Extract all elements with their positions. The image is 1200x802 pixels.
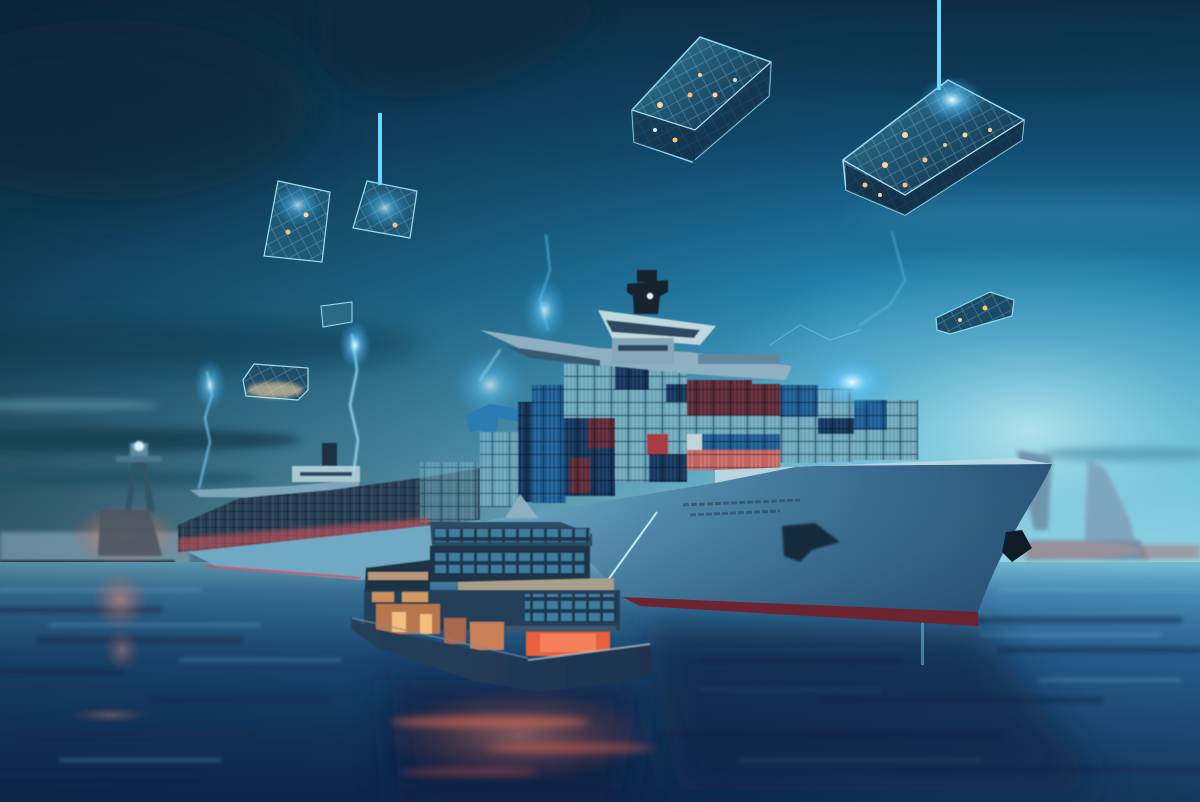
deck rail [715,458,1052,483]
boat hull [350,616,654,692]
far ship superstructure [190,443,360,498]
holo container: small [321,302,352,327]
lightning bolts [199,232,905,488]
main ship hull [430,458,1052,626]
bridge wings [480,330,792,380]
hull lettering marks [683,500,800,515]
far ship hull [188,520,520,580]
water ripples [0,590,1200,775]
water [0,562,1200,802]
boat top deck [430,494,592,546]
far container ship [178,443,520,580]
water reflections [70,570,1100,802]
distant cranes right [1000,450,1200,560]
dark clouds [0,0,1200,486]
main ship superstructure [480,270,792,380]
blue crane behind stacks [465,404,525,460]
holo beam: top right [937,0,941,90]
holo container: upper left [264,181,330,262]
main ship containers [480,364,918,507]
blue glow accents [194,278,567,419]
holo beam: upper middle [378,113,382,185]
bridge deck [598,310,716,345]
harbour crane tower left [98,441,162,556]
distant shoreline left [0,503,190,571]
anchor recess [782,523,840,562]
mast [627,280,668,314]
boat lower deck [364,590,620,656]
bow anchor [1002,530,1032,562]
waterline red band [622,597,978,626]
holo container: top right large [843,76,1024,215]
passenger boat [350,494,654,692]
holo container: left lower [243,364,308,400]
boat middle deck [364,546,614,606]
mooring line [608,512,657,580]
holo container: upper middle [353,181,417,238]
sky background [0,0,1200,620]
floating holographic containers [243,0,1024,400]
holo container: top center [632,37,771,162]
holo container: right small [936,292,1014,334]
far ship containers [178,462,480,552]
deck glow [810,354,894,410]
